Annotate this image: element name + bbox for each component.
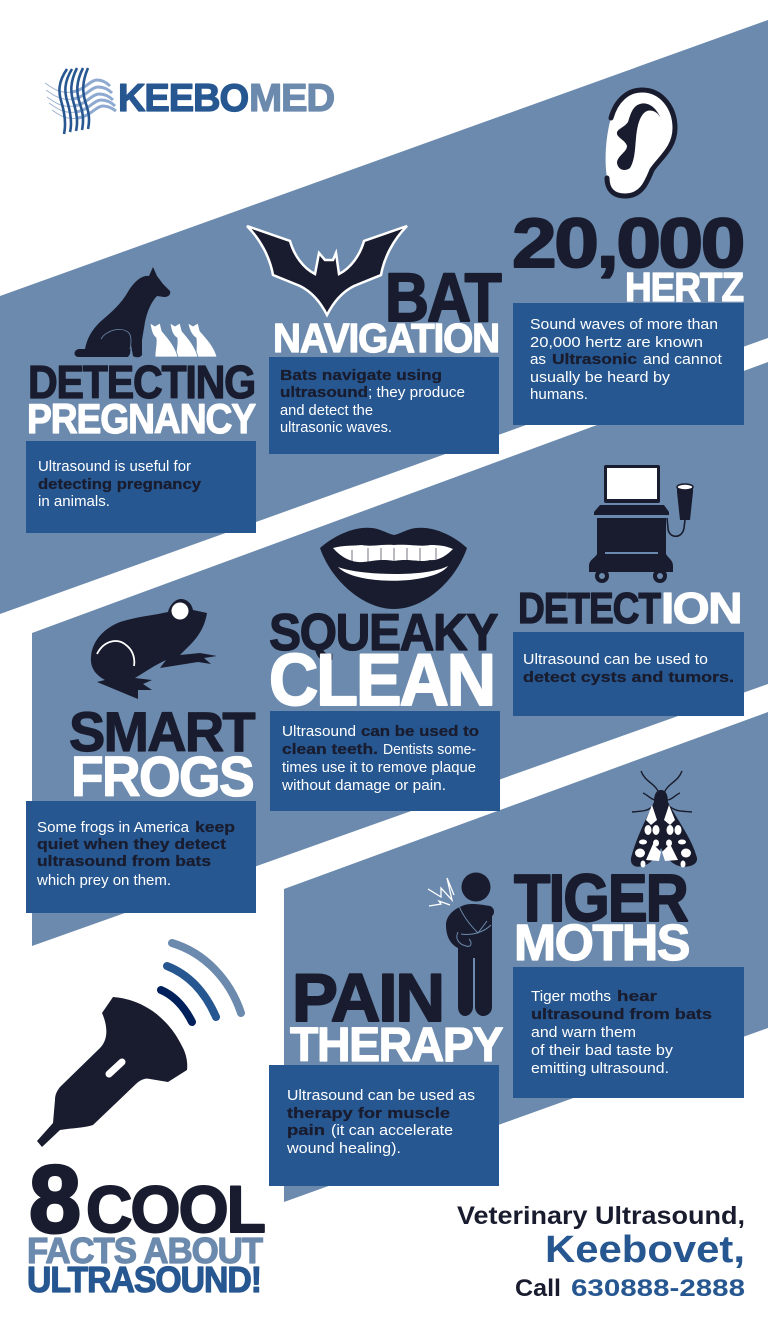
background band 3 <box>284 712 768 1202</box>
text box: 20,000 hertz are known <box>530 334 703 351</box>
text box: without damage or pain. <box>281 777 446 794</box>
text box: Ultrasound can be used as <box>287 1087 475 1104</box>
text box: can be used to <box>361 723 479 740</box>
text box: detect cysts and tumors. <box>523 669 734 686</box>
heading: detecting pregnancy <box>27 356 256 442</box>
heading: tiger moths: TIGER <box>514 861 688 936</box>
logo wave mark <box>45 68 116 134</box>
text box: Some frogs in America <box>37 819 190 836</box>
text box: times use it to remove plaque <box>282 759 476 776</box>
icon: ear <box>606 90 675 196</box>
icon: dog and puppies <box>74 267 217 357</box>
heading: smart frogs: SMART <box>69 700 255 763</box>
text box: Ultrasonic <box>552 351 637 368</box>
text box: quiet when they detect <box>37 836 226 853</box>
icon: moth <box>631 771 697 868</box>
panel: detection <box>513 465 744 716</box>
panel: tiger moths <box>513 771 744 1098</box>
text box: and cannot <box>643 351 723 368</box>
text box: as <box>530 351 546 368</box>
text box: keep <box>195 819 235 836</box>
text box: and detect the <box>280 402 373 419</box>
logo wordmark: KEEBO <box>118 77 248 120</box>
title: 8 cool facts about ultrasound <box>27 1146 265 1300</box>
heading: bat navigation <box>273 259 502 361</box>
panel: squeaky clean <box>269 528 500 811</box>
text box: wound healing). <box>286 1140 401 1157</box>
heading: pain therapy <box>290 960 503 1072</box>
title: 8 cool facts about ultrasound: 8 <box>29 1146 81 1253</box>
footer: contact details: Veterinary Ultrasound, <box>457 1202 745 1230</box>
icon: ultrasound machine <box>589 465 693 583</box>
text box: ultrasonic waves. <box>280 419 392 436</box>
icon: frog <box>91 599 217 699</box>
text box <box>26 441 256 533</box>
text box: in animals. <box>38 493 110 510</box>
text box: ultrasound from bats <box>531 1006 712 1023</box>
title: 8 cool facts about ultrasound: COOL <box>86 1172 265 1246</box>
heading: tiger moths: MOTHS <box>514 914 689 971</box>
icon: bat <box>247 226 407 315</box>
heading: detection: DETECT <box>518 584 661 633</box>
text box: Bats navigate using <box>280 367 442 384</box>
icon: person in pain <box>428 872 494 1016</box>
text box: which prey on them. <box>36 872 171 889</box>
logo: Keebomed <box>45 68 334 134</box>
text box: therapy for muscle <box>287 1105 450 1122</box>
heading: 20,000 hertz: 20,000 <box>512 204 743 282</box>
text box <box>269 1065 499 1186</box>
icon: smiling mouth <box>320 528 467 609</box>
heading: smart frogs <box>69 700 255 809</box>
heading: squeaky clean <box>269 604 498 721</box>
text box: detecting pregnancy <box>38 476 202 493</box>
text box: ultrasound from bats <box>37 853 211 870</box>
text box: and warn them <box>531 1024 636 1041</box>
text box: ; they produce <box>368 384 465 401</box>
footer: contact details: Call <box>515 1275 561 1302</box>
heading: detection: ION <box>661 584 741 633</box>
background band 2 <box>32 362 768 946</box>
text box: humans. <box>530 386 588 403</box>
heading: bat navigation: NAVIGATION <box>273 315 499 361</box>
heading: squeaky clean: SQUEAKY <box>269 604 498 662</box>
text box: Dentists some- <box>383 741 476 758</box>
heading: detecting pregnancy: DETECTING <box>28 356 255 408</box>
text box: clean teeth. <box>282 741 378 758</box>
text box <box>26 801 256 913</box>
panel: pain therapy <box>269 872 503 1186</box>
panel: 20,000 hertz <box>512 90 744 425</box>
text box: pain <box>287 1122 325 1139</box>
heading: smart frogs: FROGS <box>71 745 253 809</box>
text box: Sound waves of more than <box>530 316 718 333</box>
panel: smart frogs <box>26 599 256 913</box>
text box <box>270 711 500 811</box>
heading: bat navigation: BAT <box>385 259 502 336</box>
title: 8 cool facts about ultrasound: ULTRASOUND! <box>27 1259 261 1300</box>
heading: 20,000 hertz: HERTZ <box>625 264 743 310</box>
text box: Tiger moths <box>531 988 611 1005</box>
text box: Ultrasound is useful for <box>38 458 191 475</box>
heading: squeaky clean: CLEAN <box>269 640 494 721</box>
text box: Ultrasound <box>282 723 356 740</box>
text box: ultrasound <box>280 384 368 401</box>
text box <box>513 303 744 425</box>
panel: bat navigation <box>247 226 502 454</box>
logo: Keebomed: MED <box>249 77 334 120</box>
text box: (it can accelerate <box>331 1122 453 1139</box>
heading: 20,000 hertz <box>512 204 743 310</box>
footer: contact details: 630888-2888 <box>571 1275 745 1302</box>
heading: pain therapy: THERAPY <box>290 1019 503 1072</box>
background band 1 <box>0 20 768 614</box>
text box <box>513 632 744 716</box>
heading: pain therapy: PAIN <box>292 960 443 1036</box>
title: 8 cool facts about ultrasound: FACTS ABOUT <box>27 1230 263 1271</box>
icon: ultrasound probe with waves <box>37 943 241 1147</box>
heading: tiger moths <box>514 861 689 971</box>
text box <box>269 357 499 454</box>
panel: detecting pregnancy <box>26 267 256 533</box>
footer: contact details <box>457 1202 745 1302</box>
text box: emitting ultrasound. <box>531 1060 669 1077</box>
heading: detecting pregnancy: PREGNANCY <box>27 395 256 442</box>
footer: contact details: Keebovet, <box>545 1229 745 1271</box>
text box: usually be heard by <box>530 369 671 386</box>
text box <box>513 967 744 1098</box>
text box: of their bad taste by <box>531 1042 674 1059</box>
text box: Ultrasound can be used to <box>523 651 708 668</box>
text box: hear <box>617 988 657 1005</box>
